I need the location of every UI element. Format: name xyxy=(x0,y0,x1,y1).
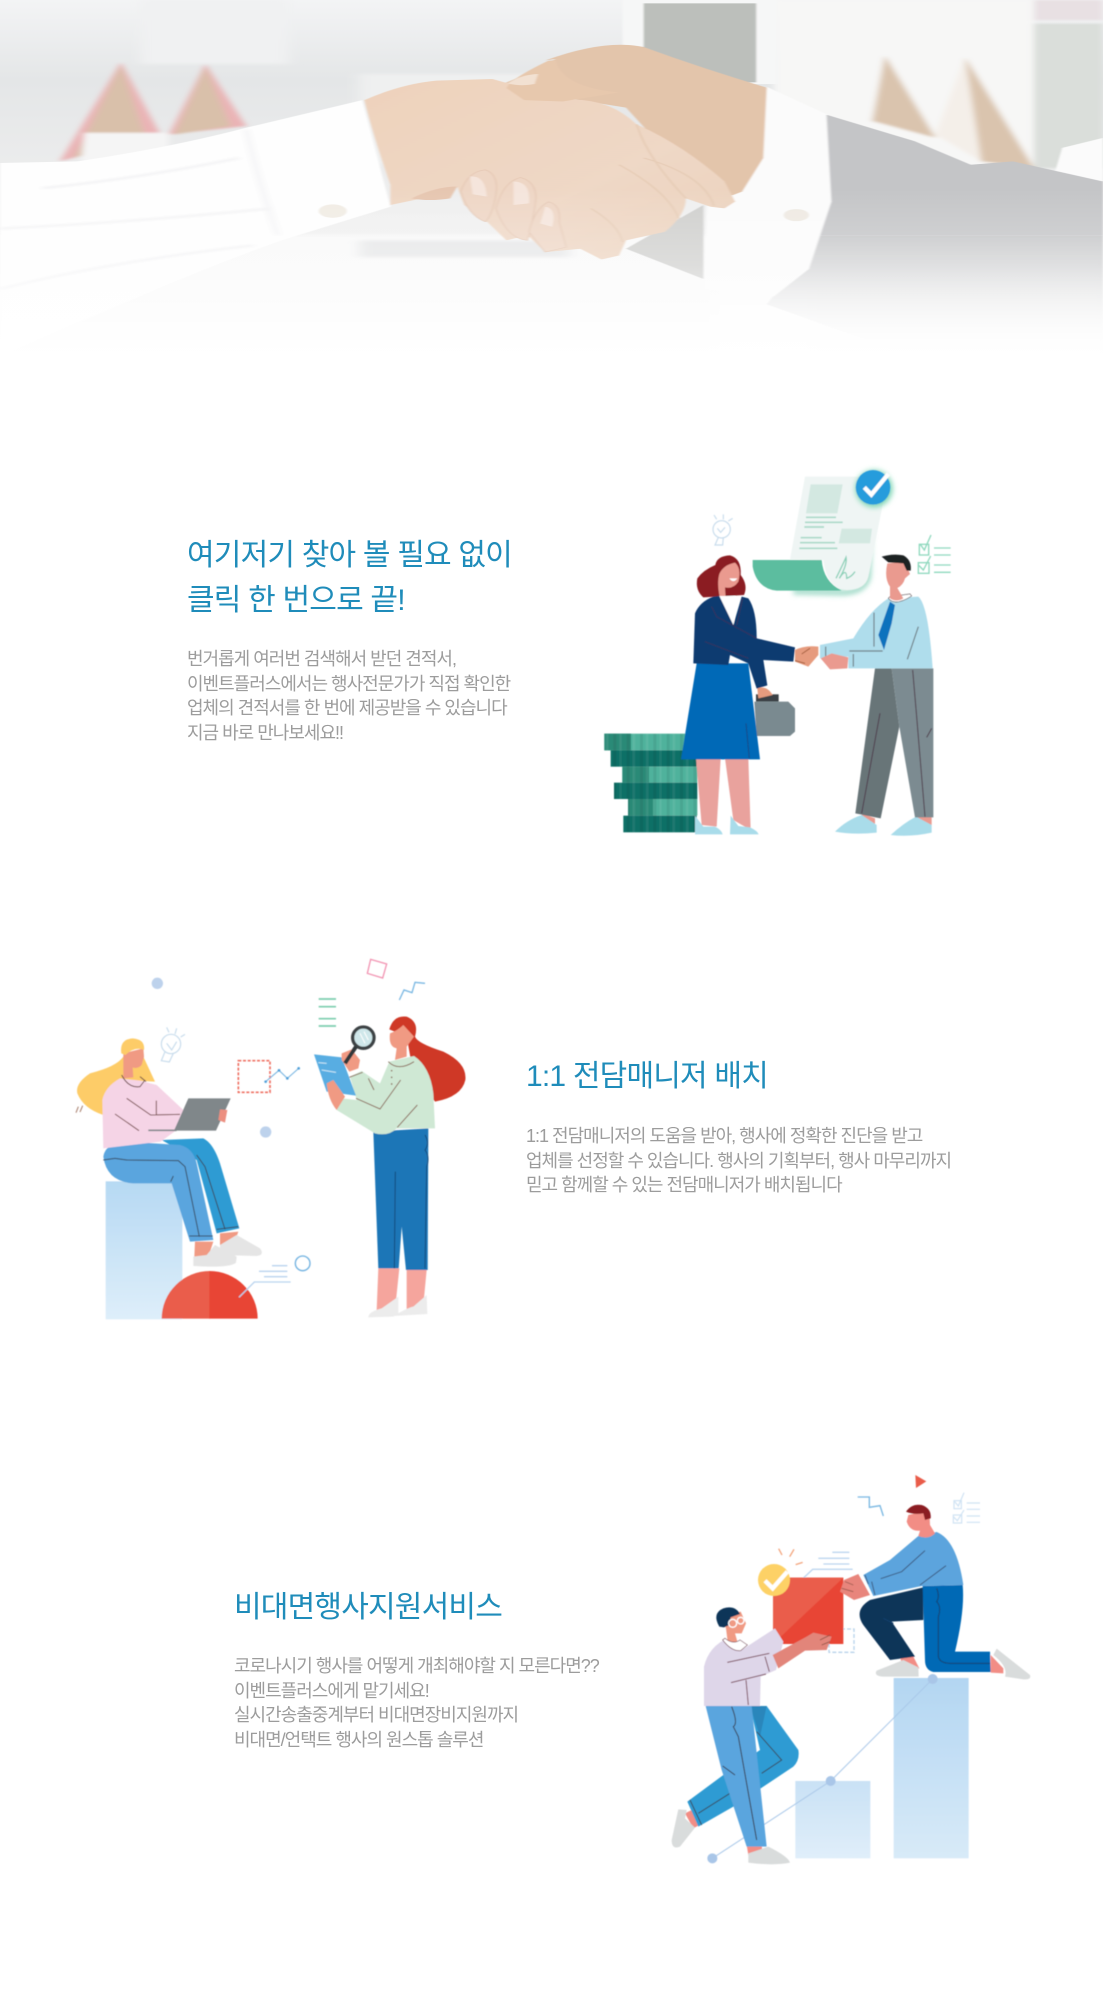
icon: checklist xyxy=(918,535,951,573)
bar chart xyxy=(707,1674,969,1863)
illustration: business handshake with contract and coins xyxy=(603,466,952,836)
decorative dots xyxy=(152,978,271,1138)
section 2 body text: 1:1 전담매니저의 도움을 받아, 행사에 정확한 진단을 받고 xyxy=(526,1126,922,1146)
icon: red triangle xyxy=(915,1475,926,1488)
icon: zigzag xyxy=(399,982,425,1000)
right shirt cuff xyxy=(703,87,831,296)
section 1 heading: 여기저기 찾아 볼 필요 없이 xyxy=(187,539,512,572)
section 3 body text xyxy=(234,1656,600,1750)
pedestal block xyxy=(106,1181,182,1319)
section 3 body text: 실시간송출중계부터 비대면장비지원까지 xyxy=(234,1705,518,1725)
red half circle xyxy=(162,1271,258,1319)
dark table wedge xyxy=(626,205,703,279)
section 1 body text: 번거롭게 여러번 검색해서 받던 견적서, xyxy=(187,649,456,669)
red box xyxy=(773,1578,843,1644)
section 2 text block xyxy=(526,1060,951,1195)
icon: sparks and lines xyxy=(779,1549,853,1584)
section 2 body text xyxy=(526,1126,951,1195)
illustration: two men lifting box over bar chart xyxy=(671,1474,1030,1865)
section 2 heading: 1:1 전담매니저 배치 xyxy=(526,1060,768,1093)
section 2 body text: 업체를 선정할 수 있습니다. 행사의 기획부터, 행사 마무리까지 xyxy=(526,1151,951,1171)
icon: dashed square xyxy=(829,1629,854,1652)
man in blue shirt xyxy=(820,555,933,836)
suit sleeve lower fading xyxy=(767,235,1103,350)
icon: line chart xyxy=(264,1067,300,1083)
section 1 heading: 클릭 한 번으로 끝! xyxy=(187,584,405,617)
section 3 body text: 이벤트플러스에게 맡기세요! xyxy=(234,1681,429,1701)
section 1 heading xyxy=(187,539,512,617)
section 3 text block xyxy=(234,1591,600,1750)
woman in navy suit xyxy=(681,555,818,834)
icon: zigzag xyxy=(858,1497,883,1516)
icon: yellow check badge xyxy=(758,1564,790,1596)
section 3 heading: 비대면행사지원서비스 xyxy=(234,1591,502,1624)
shadow finger xyxy=(412,187,457,200)
section 1 body text: 업체의 견적서를 한 번에 제공받을 수 있습니다 xyxy=(187,698,507,718)
icon: light bulb xyxy=(713,514,733,545)
fingers with nails xyxy=(461,170,566,252)
front hand xyxy=(364,79,735,259)
section 1 body text xyxy=(187,649,511,743)
icon: dashed square xyxy=(238,1061,270,1092)
section 1 text block xyxy=(187,539,512,743)
woman with magnifier xyxy=(314,1016,465,1317)
icon: callout lines and circle xyxy=(239,1256,310,1297)
icon: coin stacks xyxy=(604,734,698,832)
far right cuff xyxy=(1055,138,1103,182)
man kneeling on bar xyxy=(840,1505,1030,1679)
icon: check badge xyxy=(855,470,893,507)
hero photo: handshake xyxy=(0,0,1103,312)
icon: pink square xyxy=(367,959,387,978)
woman with laptop xyxy=(76,1038,262,1267)
section 1 body text: 지금 바로 만나보세요!! xyxy=(187,723,343,743)
left shirt sleeve xyxy=(0,100,390,356)
thumb xyxy=(506,61,619,102)
section 1 body text: 이벤트플러스에서는 행사전문가가 직접 확인한 xyxy=(187,674,510,694)
section 2 body text: 믿고 함께할 수 있는 전담매니저가 배치됩니다 xyxy=(526,1175,842,1195)
suit sleeve upper xyxy=(802,113,1103,235)
icon: light bulb xyxy=(161,1027,185,1062)
section 3 body text: 코로나시기 행사를 어떻게 개최해야할 지 모른다면?? xyxy=(234,1656,599,1676)
back hand xyxy=(506,45,768,209)
illustration: two women with laptop and magnifier xyxy=(75,958,466,1320)
man holding box xyxy=(672,1607,832,1864)
tablet xyxy=(623,0,777,84)
section 3 body text: 비대면/언택트 행사의 원스톱 솔루션 xyxy=(234,1730,483,1750)
hand shake xyxy=(795,646,818,667)
icon: contract document xyxy=(753,470,893,593)
icon: green lines xyxy=(319,999,336,1026)
icon: checklist xyxy=(953,1493,980,1523)
